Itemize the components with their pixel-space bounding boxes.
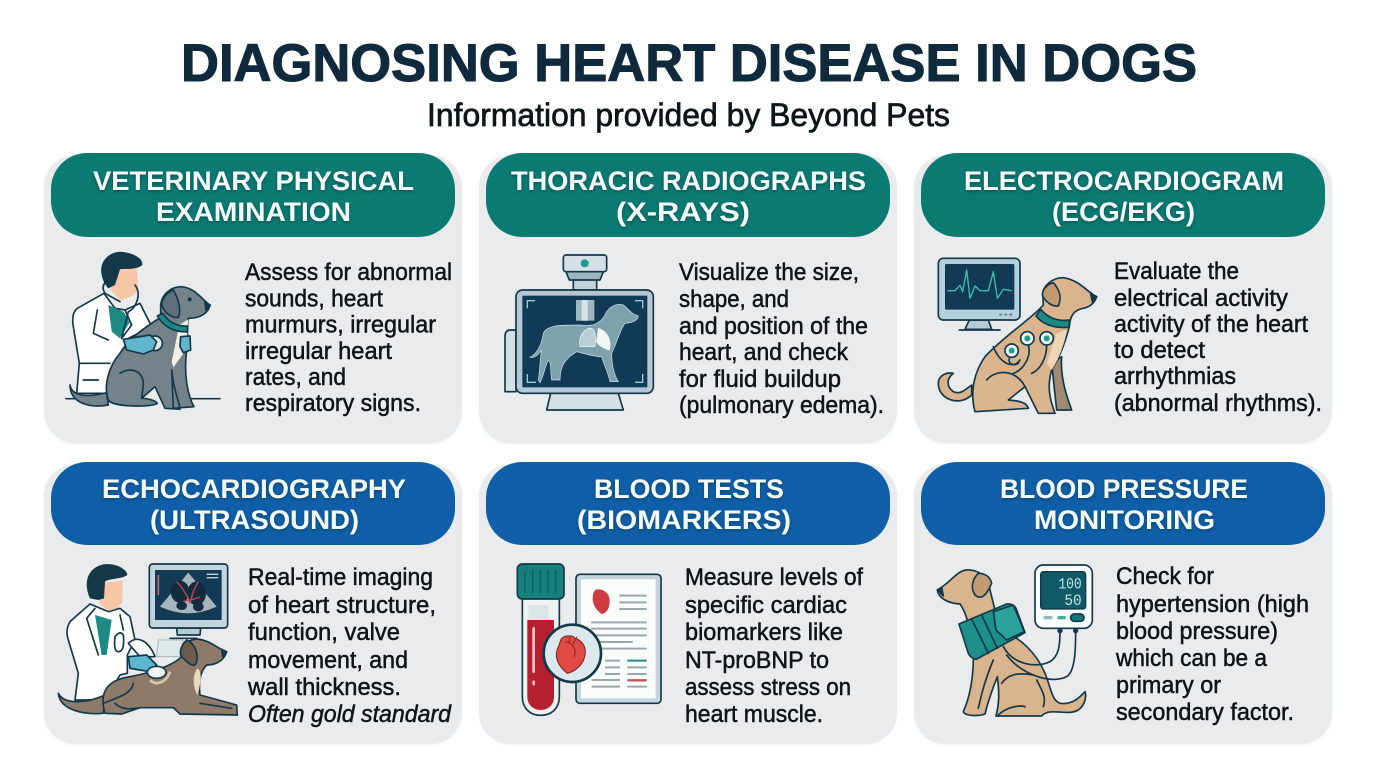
- header pill: (ULTRASOUND): [150, 505, 359, 535]
- icon: dog with blood pressure cuff and monitor: 100: [1058, 576, 1082, 594]
- header pill: [921, 153, 1325, 237]
- body text: Real-time imaging: [248, 564, 433, 591]
- card background: [479, 464, 897, 744]
- header pill: [486, 462, 890, 545]
- body text: NT-proBNP to: [685, 647, 829, 674]
- body text: irregular heart: [245, 338, 392, 365]
- header pill: (X-RAYS): [616, 197, 750, 227]
- body text: [679, 259, 884, 419]
- body text: for fluid buildup: [679, 366, 841, 393]
- panel: blood tests: [479, 462, 897, 744]
- icon: dog with electrodes and ECG monitor: [938, 258, 1097, 413]
- panel: thoracic radiographs: [479, 153, 897, 443]
- card background: [914, 464, 1332, 744]
- header pill: THORACIC RADIOGRAPHS: [511, 166, 866, 196]
- body text: biomarkers like: [685, 619, 843, 646]
- body text: arrhythmias: [1114, 363, 1236, 390]
- body text: respiratory signs.: [245, 390, 421, 417]
- panel: blood pressure monitoring: [914, 462, 1332, 744]
- body text: movement, and: [248, 647, 408, 674]
- icon: lab report: [576, 574, 661, 703]
- header pill: BLOOD PRESSURE: [1000, 474, 1248, 504]
- icon: x-ray machine with dog skeleton view: [505, 255, 653, 410]
- body text: heart muscle.: [685, 701, 823, 728]
- header pill: BLOOD TESTS: [594, 474, 784, 504]
- body text: Evaluate the: [1114, 258, 1239, 285]
- card background: [479, 155, 897, 443]
- title: DIAGNOSING HEART DISEASE IN DOGS: [181, 34, 1197, 93]
- body text: function, valve: [248, 619, 400, 646]
- icon: heart magnifier circle: [544, 625, 601, 682]
- body text: [245, 259, 452, 417]
- body text: Check for: [1116, 563, 1214, 590]
- body text: hypertension (high: [1116, 591, 1309, 618]
- card background: [914, 155, 1332, 443]
- header pill: ECHOCARDIOGRAPHY: [102, 474, 406, 504]
- header pill: [51, 462, 455, 545]
- header pill: VETERINARY PHYSICAL: [93, 166, 414, 196]
- icon: blood tube: [517, 564, 564, 715]
- header pill: (BIOMARKERS): [577, 505, 791, 535]
- card background: [44, 464, 462, 744]
- body text: Assess for abnormal: [245, 259, 452, 286]
- body text: rates, and: [245, 364, 346, 391]
- body text: wall thickness.: [247, 674, 401, 701]
- header pill: MONITORING: [1034, 505, 1215, 535]
- body text: [247, 564, 452, 728]
- header pill: [51, 153, 455, 237]
- body text: blood pressure): [1116, 618, 1278, 645]
- subtitle: Information provided by Beyond Pets: [427, 97, 950, 133]
- body text: of heart structure,: [248, 592, 436, 619]
- body text: (abnormal rhythms).: [1114, 390, 1322, 417]
- body text: activity of the heart: [1114, 311, 1308, 338]
- body text: to detect: [1114, 337, 1205, 364]
- body text: [1114, 258, 1322, 417]
- body text: heart, and check: [679, 339, 849, 366]
- body text: Often gold standard: [248, 701, 452, 728]
- header pill: EXAMINATION: [156, 197, 351, 227]
- body text: sounds, heart: [245, 286, 383, 312]
- icon: vet examining grey dog with stethoscope: [66, 252, 220, 409]
- body text: Measure levels of: [685, 564, 863, 591]
- card background: [44, 155, 462, 443]
- body text: which can be a: [1115, 645, 1268, 672]
- body text: Visualize the size,: [679, 259, 859, 286]
- icon: dog with blood pressure cuff and monitor: [937, 565, 1092, 716]
- panel: echocardiography: [44, 462, 462, 744]
- icon: vet performing ultrasound on lying dog: [58, 564, 237, 715]
- header pill: ELECTROCARDIOGRAM: [964, 166, 1284, 196]
- header pill: [486, 153, 890, 237]
- body text: specific cardiac: [685, 592, 847, 619]
- panel: electrocardiogram: [914, 153, 1332, 443]
- panel: veterinary physical examination: [44, 153, 462, 443]
- body text: [1115, 563, 1309, 726]
- body text: secondary factor.: [1116, 699, 1294, 726]
- header pill: [921, 462, 1325, 545]
- body text: [685, 564, 863, 728]
- icon: blood tube, lab report and heart: [517, 564, 661, 715]
- body text: and position of the: [679, 313, 868, 340]
- body text: (pulmonary edema).: [679, 392, 884, 419]
- icon: dog with blood pressure cuff and monitor: 50: [1064, 592, 1082, 610]
- body text: shape, and: [679, 286, 789, 313]
- body text: assess stress on: [685, 674, 851, 701]
- body text: primary or: [1116, 672, 1221, 699]
- body text: murmurs, irregular: [245, 312, 436, 338]
- header pill: (ECG/EKG): [1052, 197, 1195, 227]
- body text: electrical activity: [1114, 285, 1288, 312]
